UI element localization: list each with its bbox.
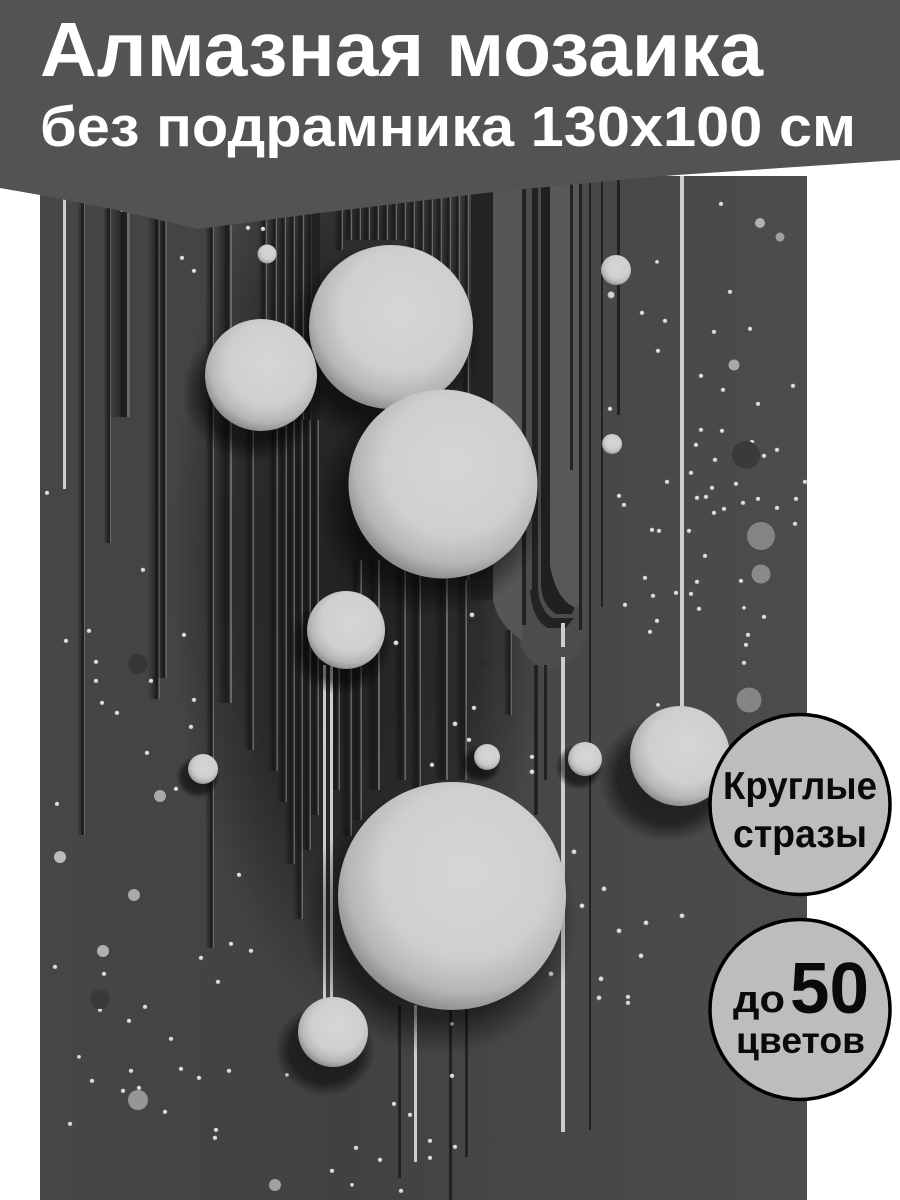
medium grey discs — [54, 218, 784, 1191]
badge: up to 50 colours: цветов — [736, 1020, 865, 1061]
light lines — [63, 176, 684, 1162]
spheres: small — [188, 244, 631, 784]
badge: round rhinestones: стразы — [733, 813, 867, 856]
vertical ribs: top centre comb — [258, 180, 469, 580]
curved panel shape — [493, 180, 590, 668]
title: Алмазная мозаика — [40, 7, 764, 93]
sphere shadows — [176, 245, 738, 1096]
badge: up to 50 colours: до — [733, 979, 785, 1021]
badge: up to 50 colours — [710, 920, 890, 1100]
vertical ribs: left field — [77, 198, 512, 948]
dark lines — [398, 180, 620, 1200]
badge: up to 50 colours: 50 — [790, 949, 869, 1029]
small pearl dots — [45, 202, 807, 1193]
badge: round rhinestones — [710, 714, 890, 894]
top banner — [0, 0, 900, 229]
spheres: large — [205, 245, 730, 1067]
subtitle: без подрамника 130х100 см — [40, 95, 856, 159]
badge: round rhinestones: Круглые — [723, 765, 877, 808]
central shadow area — [170, 100, 550, 1020]
painting: abstract spheres canvas — [40, 100, 807, 1200]
